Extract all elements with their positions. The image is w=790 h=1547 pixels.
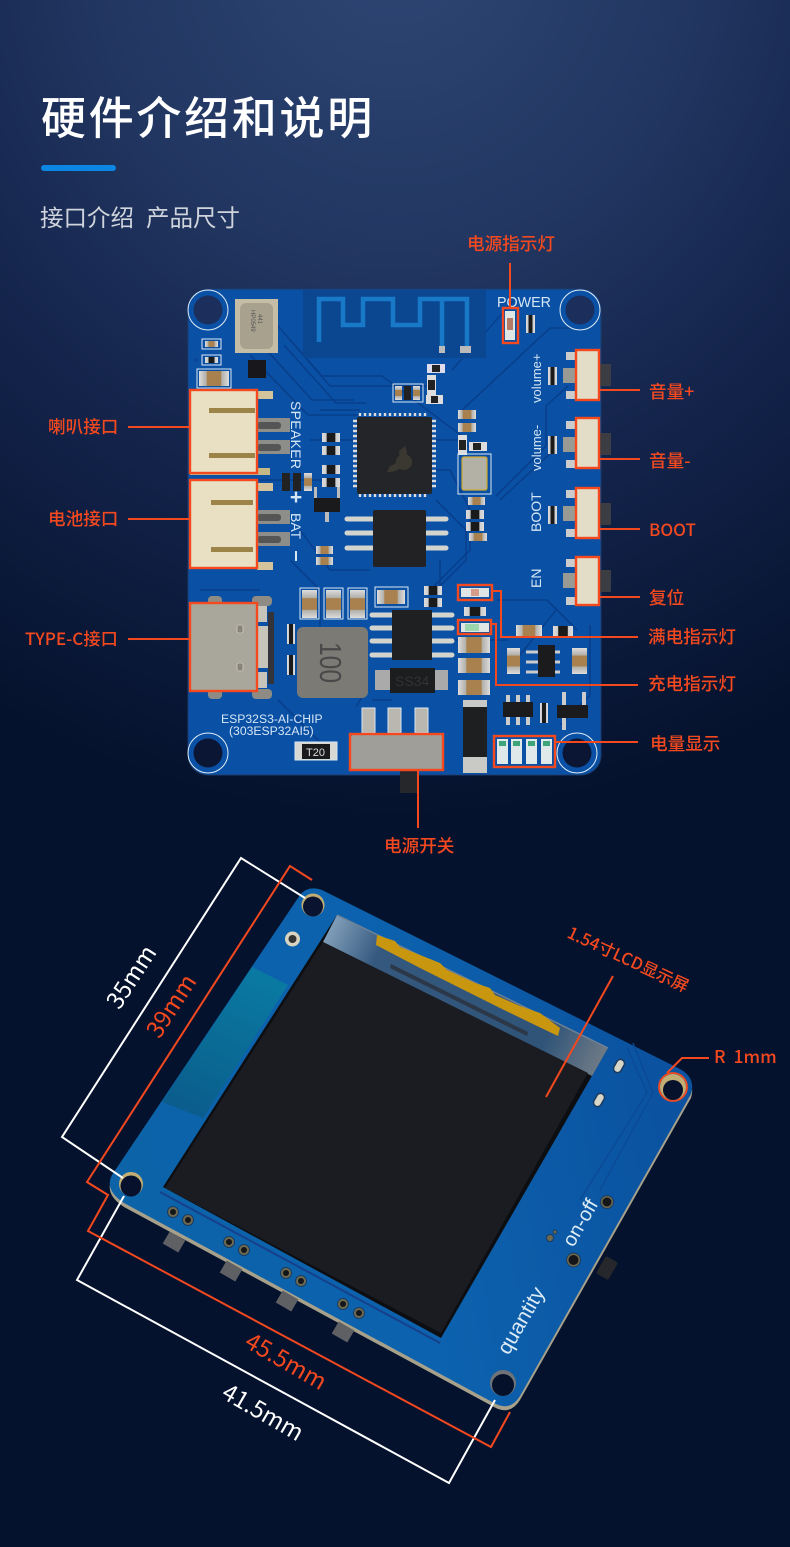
LCD bottom navy edge <box>160 1192 440 1343</box>
LCD glass and flex <box>323 915 608 1076</box>
orange highlight boxes <box>190 308 599 770</box>
label: battery level: 电量显示 <box>650 731 720 756</box>
dimension: 41.5mm: 41.5mm <box>217 1374 311 1448</box>
side slide switch <box>596 1256 618 1280</box>
label: volume down: 音量- <box>649 448 690 473</box>
main chip <box>353 413 436 497</box>
panel: top PCB board <box>188 289 611 793</box>
silkscreen: EN <box>528 569 544 588</box>
microphone: 441 <box>256 314 262 325</box>
speaker connector <box>190 390 290 475</box>
battery connector <box>190 480 290 570</box>
label: speaker: 喇叭接口 <box>48 414 118 439</box>
board edge thickness <box>110 892 692 1410</box>
inductor: 100 <box>313 642 348 683</box>
solder pads <box>592 1058 626 1108</box>
label: reset: 复位 <box>649 585 684 610</box>
dimension lines orange <box>87 866 510 1447</box>
LCD screen <box>165 942 588 1333</box>
silkscreen: volume+ <box>529 354 544 403</box>
yellow flex <box>376 935 560 1036</box>
subtitle: 产品尺寸 <box>146 199 240 233</box>
dimension lines white <box>62 858 495 1483</box>
glass top edge <box>337 915 608 1048</box>
microphone <box>235 299 278 353</box>
corner radius callout: R 1mm <box>714 1044 777 1069</box>
silkscreen: + <box>290 486 302 509</box>
capacitors and regulator <box>287 586 588 730</box>
title: 硬件介绍和说明 <box>41 82 375 147</box>
board body <box>110 888 692 1406</box>
label: volume up: 音量+ <box>649 379 694 404</box>
traces <box>200 300 590 760</box>
leader lines <box>128 263 640 828</box>
dimension: 39mm: 39mm <box>137 967 203 1043</box>
label: boot: BOOT <box>649 516 696 541</box>
silkscreen: T20 <box>306 747 325 759</box>
label: charging indicator: 充电指示灯 <box>648 671 736 696</box>
LEDs <box>461 311 552 764</box>
power switch <box>351 708 443 793</box>
title accent bar <box>41 165 116 171</box>
dimension: 45.5mm: 45.5mm <box>240 1323 334 1397</box>
silkscreen: (303ESP32AI5) <box>229 724 314 738</box>
header holes <box>168 1196 614 1318</box>
labels: power indicator: 电源指示灯 <box>467 231 555 256</box>
label: power switch: 电源开关 <box>384 833 455 858</box>
silkscreen <box>221 295 551 760</box>
panel: angled board with LCD <box>110 888 692 1410</box>
inductor <box>297 627 368 698</box>
silkscreen: volume- <box>529 425 544 471</box>
silkscreen: ESP32S3-AI-CHIP <box>221 712 323 726</box>
header hole centers <box>170 1198 612 1316</box>
small components upper left <box>194 339 487 565</box>
dimension: 35mm: 35mm <box>97 938 163 1014</box>
antenna <box>303 290 486 358</box>
printed text on-off: on-off <box>559 1195 603 1250</box>
printed text quantity: quantity <box>493 1283 550 1358</box>
LCD bezel <box>163 915 608 1338</box>
mounting holes <box>119 894 686 1396</box>
label: type-c: TYPE-C接口 <box>25 625 118 650</box>
capacitors and regulator: SS34 <box>395 673 429 689</box>
blue translucent band <box>162 967 288 1118</box>
silkscreen: POWER <box>497 295 551 311</box>
crystal <box>458 454 491 494</box>
corner radius callout <box>659 1044 777 1101</box>
silkscreen: BOOT <box>528 492 544 532</box>
side buttons <box>163 1231 354 1343</box>
type-c connector <box>190 596 274 699</box>
big diode <box>463 700 487 773</box>
lower chip <box>347 510 446 567</box>
LCD callout <box>546 920 693 1097</box>
right side buttons <box>548 350 611 605</box>
LCD callout: 1.54寸LCD显示屏 <box>564 920 693 997</box>
subtitle: 接口介绍 <box>40 199 134 233</box>
mounting holes <box>188 290 600 773</box>
label: battery: 电池接口 <box>48 506 118 531</box>
microphone: HP0549 <box>249 310 255 332</box>
connector strip <box>390 964 528 1036</box>
silkscreen: SPEAKER <box>288 401 304 469</box>
board traces <box>580 1043 653 1200</box>
label: full indicator: 满电指示灯 <box>648 624 736 649</box>
silkscreen: BAT <box>288 513 304 540</box>
